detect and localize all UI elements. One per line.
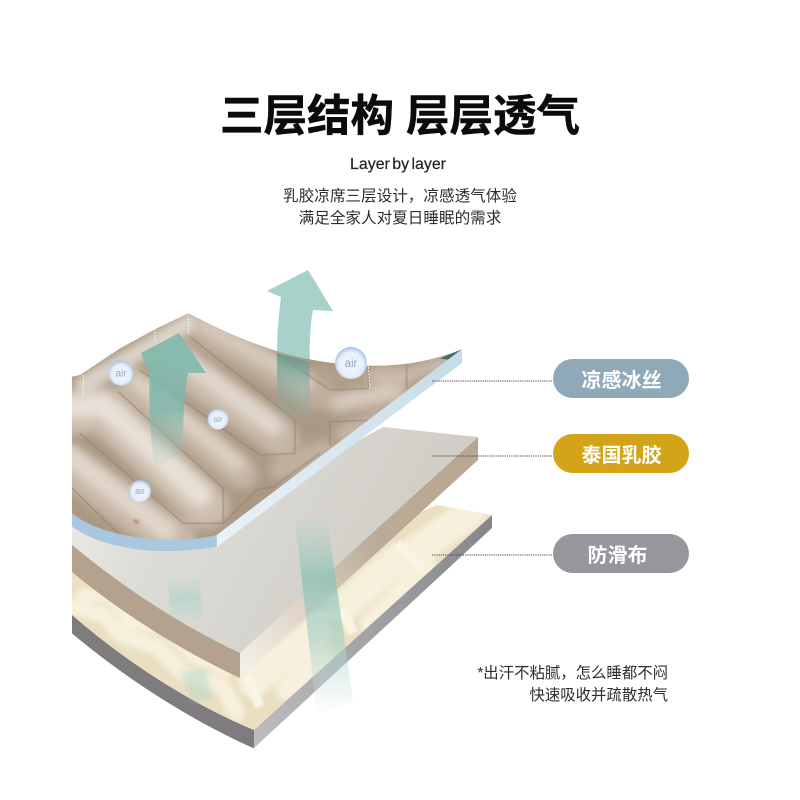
layer: anti-slip cloth	[72, 505, 492, 748]
title: 三层结构 层层透气	[220, 93, 580, 141]
note text	[477, 664, 668, 704]
label pill: 凉感冰丝: 凉感冰丝	[582, 369, 662, 392]
icon: air bubble 4: air	[345, 358, 358, 370]
description text: 满足全家人对夏日睡眠的需求	[299, 209, 502, 227]
note text: *出汗不粘腻，怎么睡都不闷	[477, 664, 668, 682]
arrow: faint air stream on latex	[167, 575, 203, 622]
icon: air bubble 1	[108, 360, 134, 386]
label pill: 防滑布: 防滑布	[588, 544, 648, 567]
arrow: air stream through lower layers	[295, 518, 353, 716]
label pill: 防滑布	[553, 534, 689, 573]
label pill: 泰国乳胶: 泰国乳胶	[582, 443, 662, 467]
icon: air bubble 2	[208, 408, 228, 430]
description text: 乳胶凉席三层设计，凉感透气体验	[283, 187, 517, 205]
layer: cooling ice silk	[67, 313, 462, 551]
arrow: faint air stream on cloth	[180, 668, 213, 702]
arrow: small air arrow over top layer	[141, 333, 206, 470]
layer: Thai latex	[72, 427, 478, 678]
leader line: ice silk	[432, 380, 553, 382]
arrow: large air arrow behind top layer	[267, 270, 333, 365]
icon: air bubble 4	[335, 347, 367, 379]
arrow: large air arrow fading over top layer	[277, 353, 312, 425]
description text	[283, 187, 517, 227]
icon: air bubble 3	[129, 480, 151, 502]
icon: air bubble 3: air	[135, 486, 145, 496]
label pill: 凉感冰丝	[553, 359, 689, 398]
icon: air bubble 1: air	[115, 368, 127, 380]
icon: air bubble 2: air	[213, 414, 223, 424]
label pill: 泰国乳胶	[553, 434, 689, 473]
subtitle: Layer by layer: Layer by layer	[350, 156, 446, 173]
note text: 快速吸收并疏散热气	[529, 686, 668, 704]
leader line: latex	[432, 455, 553, 457]
leader line: anti-slip	[432, 554, 553, 556]
